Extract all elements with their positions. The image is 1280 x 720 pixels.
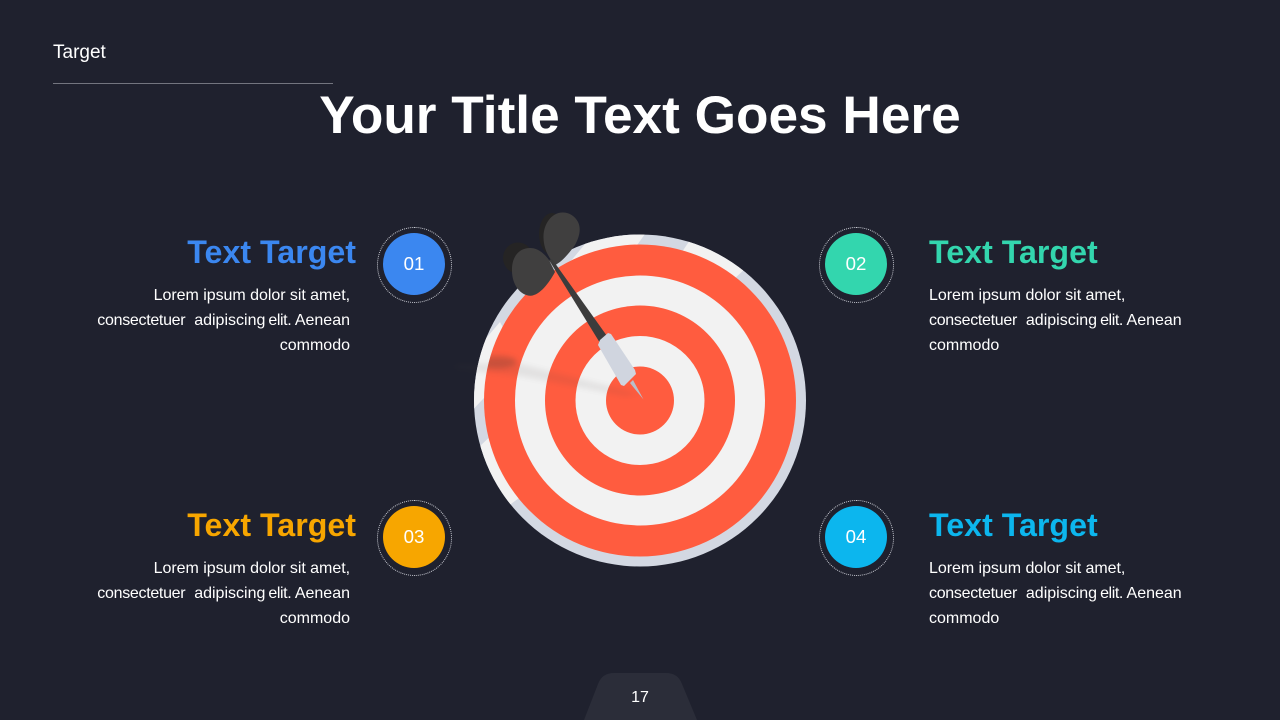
item 04 body: Lorem ipsum dolor sit amet, [929,560,1125,577]
item 03 heading: Text Target [187,506,356,542]
item 01 [97,227,452,354]
item 02 body [929,287,1182,354]
item 03 badge: 03 [404,526,424,547]
page number: 17 [631,689,649,706]
item 03 badge [383,506,445,568]
dartboard [465,220,806,566]
section label: Target [53,42,106,63]
dart [503,212,644,400]
item 03 body: Lorem ipsum dolor sit amet, [154,560,350,577]
item 04 body: commodo [929,610,999,627]
target illustration [474,212,806,566]
item 02 badge: 02 [846,253,866,274]
item 02 heading: Text Target [929,234,1098,270]
item 02 badge [825,233,887,295]
item 01 body: consectetuer adipiscing elit. Aenean [97,312,350,329]
title: Your Title Text Goes Here [319,86,961,145]
header rule [53,83,333,84]
item 01 badge [383,233,445,295]
item 03 body [97,560,350,627]
item 04 body [929,560,1182,627]
item 04 dotted ring [819,500,894,576]
page number tab [584,673,697,720]
item 04 [819,500,1182,627]
item 01 heading: Text Target [187,234,356,270]
item 04 heading: Text Target [929,506,1098,542]
item 02 [819,227,1182,354]
item 03 dotted ring [377,500,452,576]
item 01 body: commodo [280,337,350,354]
item 03 body: commodo [280,610,350,627]
item 01 badge: 01 [404,253,424,274]
item 02 body: commodo [929,337,999,354]
item 03 [97,500,452,627]
item 02 body: consectetuer adipiscing elit. Aenean [929,312,1182,329]
item 01 body: Lorem ipsum dolor sit amet, [154,287,350,304]
item 01 dotted ring [377,227,452,303]
item 04 badge: 04 [846,526,866,547]
item 01 body [97,287,350,354]
item 02 body: Lorem ipsum dolor sit amet, [929,287,1125,304]
item 04 badge [825,506,887,568]
item 03 body: consectetuer adipiscing elit. Aenean [97,585,350,602]
item 02 dotted ring [819,227,894,303]
dart shadow [477,354,630,396]
item 04 body: consectetuer adipiscing elit. Aenean [929,585,1182,602]
